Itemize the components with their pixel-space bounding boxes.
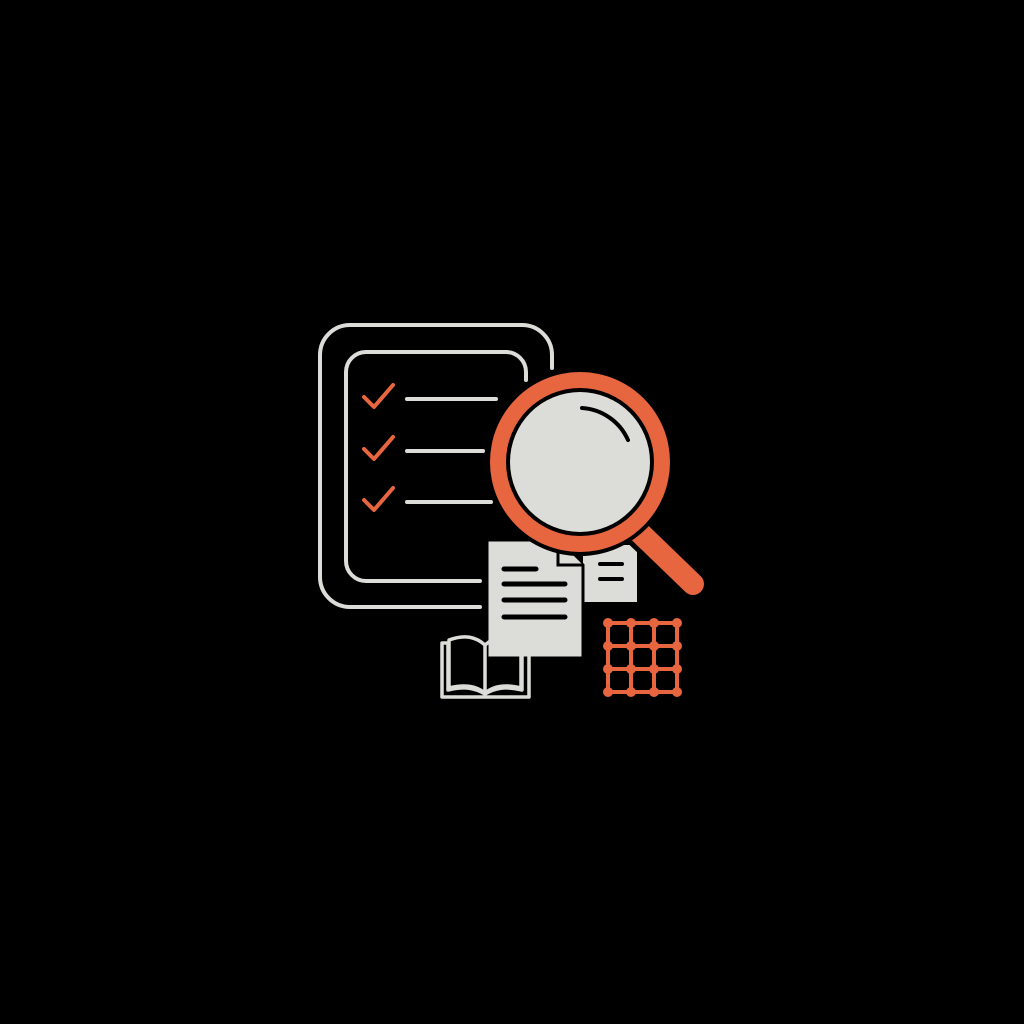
icon: open book — [442, 637, 529, 697]
icon: orange grid network — [603, 618, 682, 697]
icon: document 2 — [583, 545, 637, 602]
icon: magnifying glass — [486, 368, 693, 584]
icon: document 1 — [487, 540, 583, 658]
icon: clipboard frame — [320, 325, 552, 607]
checklist items — [364, 385, 496, 510]
